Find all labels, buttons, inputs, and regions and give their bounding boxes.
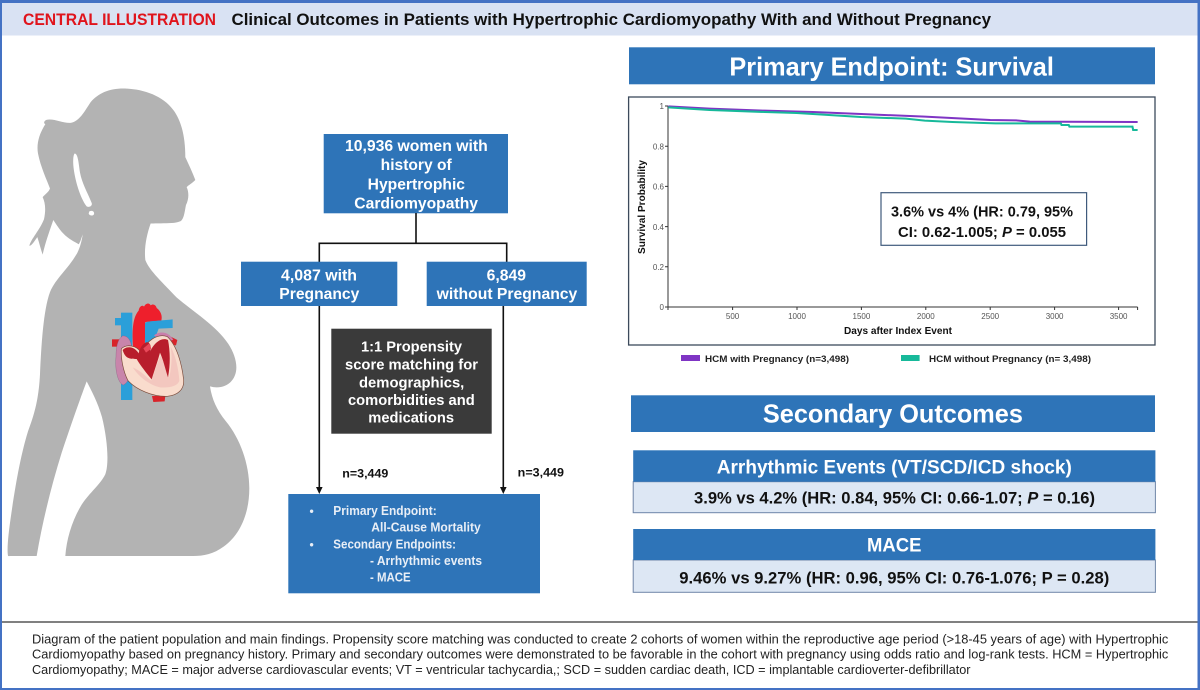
- flow box: with pregnancy: [241, 262, 397, 306]
- flow box: without pregnancy: 6,849: [487, 268, 526, 285]
- statistics callout: 3.6% vs 4% (HR: 0.79, 95%: [891, 204, 1073, 221]
- title: Clinical Outcomes in Patients with Hypertrophic Cardiomyopathy With and Without Pregnancy: [232, 11, 992, 29]
- flow box: without pregnancy: without Pregnancy: [436, 286, 578, 303]
- y tick labels: 0: [660, 303, 665, 312]
- legend: HCM with Pregnancy (n=3,498): [705, 354, 849, 365]
- survival curves: [668, 106, 1138, 130]
- survival chart: [629, 97, 1155, 345]
- statistics callout: CI: 0.62-1.005; P = 0.055: [898, 224, 1066, 241]
- x tick labels: 3500: [1110, 312, 1128, 321]
- x tick labels: [726, 312, 1128, 321]
- flow box: propensity matching: score matching for: [345, 357, 478, 373]
- x tick labels: 1500: [853, 312, 871, 321]
- flow box: with pregnancy: 4,087 with: [281, 268, 357, 285]
- x tick labels: 1000: [788, 312, 806, 321]
- flow box: endpoints: •: [310, 504, 314, 518]
- y tick labels: 0.4: [653, 223, 665, 232]
- axis title: x: Days after Index Event: [844, 326, 953, 337]
- x tick labels: 500: [726, 312, 740, 321]
- axis title: y: Survival Probability: [637, 160, 648, 254]
- flow box: endpoints: Secondary Endpoints:: [333, 537, 456, 551]
- panel: arrhythmic events: [633, 450, 1155, 513]
- flow box: endpoints: [288, 494, 540, 593]
- flow box: propensity matching: 1:1 Propensity: [361, 340, 462, 356]
- flow box: propensity matching: medications: [368, 410, 454, 426]
- pregnant woman silhouette: [8, 89, 249, 556]
- flow box: propensity matching: demographics,: [359, 375, 464, 391]
- icon: anatomical heart: [112, 303, 184, 402]
- panel: arrhythmic events: Arrhythmic Events (VT/SCD/ICD shock): [717, 456, 1072, 478]
- flow box: endpoints: - Arrhythmic events: [370, 554, 482, 568]
- heading: secondary outcomes: [631, 395, 1155, 432]
- footer caption: Diagram of the patient population and main findings. Propensity score matching was conducted to create 2 cohorts of women within the reproductive age period (>18-45 years of age) with Hypertrophic: [32, 632, 1168, 646]
- panel: arrhythmic events: 3.9% vs 4.2% (HR: 0.84, 95% CI: 0.66-1.07; P = 0.16): [694, 489, 1095, 507]
- flow box: total population: history of: [381, 157, 453, 174]
- legend: HCM without Pregnancy (n= 3,498): [929, 354, 1091, 365]
- legend: [681, 354, 1091, 365]
- heading: secondary outcomes: Secondary Outcomes: [763, 398, 1023, 428]
- heading: primary endpoint: [629, 47, 1155, 84]
- flow box: with pregnancy: Pregnancy: [279, 286, 360, 303]
- heading: primary endpoint: Primary Endpoint: Survival: [729, 51, 1054, 81]
- label: central illustration: CENTRAL ILLUSTRATION: [23, 11, 216, 29]
- footer caption: Cardiomyopathy based on pregnancy history. Primary and secondary outcomes were demonstrated to be favorable in the cohort with pregnancy using odds ratio and log-rank tests. HCM = Hypertrophic: [32, 648, 1168, 662]
- arrow: left cohort: [316, 306, 323, 494]
- y tick labels: 0.6: [653, 183, 665, 192]
- flow box: endpoints: •: [310, 537, 314, 551]
- axes: [665, 106, 1138, 310]
- flow box: propensity matching: comorbidities and: [348, 393, 475, 409]
- footer caption: Cardiomyopathy; MACE = major adverse cardiovascular events; VT = ventricular tachycardia,; SCD = sudden cardiac death, ICD = implantable cardioverter-defibrillator: [32, 663, 970, 677]
- panel: MACE: [633, 529, 1155, 592]
- y tick labels: 1: [660, 102, 665, 111]
- flow box: total population: Cardiomyopathy: [354, 195, 478, 212]
- flow box: total population: Hypertrophic: [368, 176, 465, 193]
- header band: [2, 3, 1198, 36]
- flow box: total population: 10,936 women with: [345, 138, 488, 155]
- statistics callout: [881, 193, 1087, 245]
- x tick labels: 3000: [1046, 312, 1064, 321]
- panel: MACE: 9.46% vs 9.27% (HR: 0.96, 95% CI: 0.76-1.076; P = 0.28): [679, 569, 1109, 587]
- flow box: endpoints: Primary Endpoint:: [333, 504, 437, 518]
- y tick labels: [653, 102, 665, 312]
- flow box: endpoints: - MACE: [370, 571, 411, 585]
- flow box: without pregnancy: [427, 262, 587, 306]
- label: right n: n=3,449: [518, 468, 564, 480]
- label: left n: n=3,449: [342, 468, 388, 480]
- x tick labels: 2500: [981, 312, 1000, 321]
- panel: MACE: MACE: [867, 535, 921, 557]
- y tick labels: 0.2: [653, 263, 665, 272]
- connector: split into cohorts: [319, 213, 507, 262]
- flow box: total population: [324, 134, 508, 213]
- flow box: propensity matching: [331, 329, 492, 434]
- x tick labels: 2000: [917, 312, 935, 321]
- arrow: right cohort: [500, 306, 507, 494]
- y tick labels: 0.8: [653, 142, 665, 152]
- flow box: endpoints: All-Cause Mortality: [371, 521, 481, 535]
- footer caption: [2, 621, 1198, 677]
